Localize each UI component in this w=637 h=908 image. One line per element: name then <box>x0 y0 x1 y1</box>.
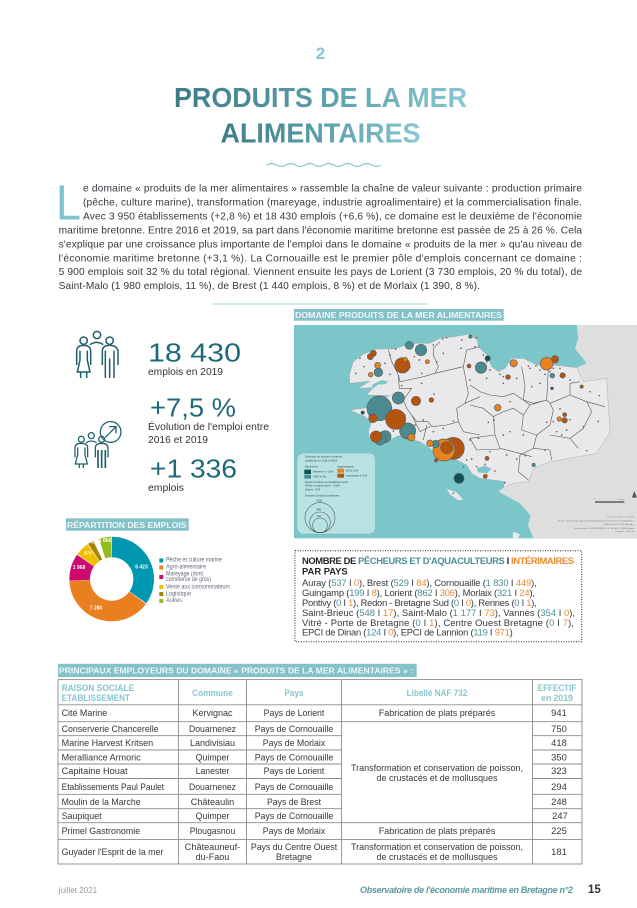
table column: town <box>185 707 240 862</box>
icon: people with rising arrow <box>75 422 121 468</box>
table header: Libellé NAF 732 <box>407 688 467 699</box>
map legend: Emploi maritime comptabilisé à part : <box>305 480 350 484</box>
map legend: 1 800 <box>315 498 323 502</box>
legend: commerce de gros) <box>166 577 211 583</box>
intro paragraph: e domaine « produits de la mer alimentaires » rassemble la chaîne de valeur suivante : production primaire <box>83 183 582 194</box>
map legend: 0% à 10% <box>346 469 359 473</box>
stat: employment change rate: 2016 et 2019 <box>148 434 208 446</box>
panel: fishers and temps by pays <box>295 551 582 642</box>
footer: date: juillet 2021 <box>58 886 98 895</box>
box list: Guingamp (199 I 8), Lorient (862 I 306), Morlaix (321 I 24), <box>302 587 535 598</box>
table column: town: Landivisiau <box>190 737 235 748</box>
table column: company: Primel Gastronomie <box>62 825 140 836</box>
title: PRODUITS DE LA MER <box>174 82 467 113</box>
intro paragraph: maritime bretonne. Entre 2016 et 2019, sa part dans l'économie maritime bretonne est passée de 25 à 26 %. Cela <box>59 226 582 237</box>
intro paragraph: s'explique par une croissance plus importante de l'emploi dans le domaine « produits de la mer » qu'au niveau de <box>59 239 582 250</box>
stat: employment change rate <box>148 395 269 446</box>
table column: pays: Pays de Lorient <box>264 765 325 776</box>
administrative boundaries <box>388 342 605 480</box>
map sources: & Réseau des CCI de Bretagne <box>603 523 635 526</box>
stat: employment change rate: +7,5 % <box>150 395 236 423</box>
table column: headcount: 350 <box>551 752 567 762</box>
stat: jobs gained: emplois <box>148 482 184 494</box>
table header <box>62 683 576 704</box>
intro paragraph: 5 900 emplois soit 32 % du total régional. Viennent ensuite les pays de Lorient (3 730 emplois, 20 % du total), de <box>59 267 582 278</box>
table header: EFFECTIF <box>538 683 576 694</box>
footer: publication name: Observatoire de l'économie maritime en Bretagne n°2 <box>360 885 573 895</box>
table column: pays: Pays de Morlaix <box>263 825 326 836</box>
map heading: DOMAINE PRODUITS DE LA MER ALIMENTAIRES <box>295 310 502 320</box>
legend: Agro-alimentaire <box>166 564 207 570</box>
table column: NAF label: Fabrication de plats préparés <box>379 825 496 836</box>
table column: town: Châteauneuf- <box>185 841 240 852</box>
bubbles: employment change by zone <box>361 335 583 483</box>
table column: NAF label <box>351 707 523 862</box>
map legend: Intérim : 675 <box>305 487 321 491</box>
table column: headcount: 247 <box>552 810 568 821</box>
intro paragraph <box>59 183 582 292</box>
table column: pays: Pays de Brest <box>267 796 321 807</box>
table column: headcount: 750 <box>551 723 567 734</box>
table grid <box>58 680 582 864</box>
scale bar and north arrow <box>594 491 637 503</box>
donut values <box>73 538 148 612</box>
table column: pays: Pays de Cornouaille <box>255 810 333 821</box>
table column: company: Moulin de la Marche <box>62 796 141 807</box>
table column: headcount: 248 <box>551 796 567 807</box>
box heading <box>302 555 574 576</box>
donut values: 6 423 <box>135 564 148 570</box>
stat: employment change rate: Évolution de l'emploi entre <box>148 420 269 433</box>
table header: Commune <box>192 688 233 699</box>
box list <box>302 577 575 638</box>
table column: company: Cité Marine <box>62 707 107 718</box>
map legend <box>297 453 375 534</box>
table column: town: Châteaulin <box>191 796 234 807</box>
table column: company <box>62 707 164 857</box>
legend: Vente aux consommateurs <box>166 584 230 590</box>
map legend: Evolution du nombre d'emplois <box>305 455 343 459</box>
panel: job breakdown <box>66 518 230 612</box>
stat: jobs gained <box>148 456 237 494</box>
map legend: Augmentation <box>337 464 355 468</box>
stat: employment 2019 <box>148 340 241 378</box>
table column: company: Capitaine Houat <box>62 765 128 776</box>
table header: Pays <box>284 688 304 699</box>
table column: town: du-Faou <box>196 851 229 862</box>
table column: pays: Pays de Cornouaille <box>255 752 333 762</box>
box list: EPCI de Dinan (124 I 0), EPCI de Lannion (119 I 971) <box>302 627 513 638</box>
panel: map <box>294 309 637 538</box>
map sources: Fond de carte : IGN BD CARTO® N° 00140-CC-IGN-Lambert <box>574 527 634 530</box>
map legend: 400 <box>317 514 322 518</box>
intro paragraph: Avec 3 950 établissements (+2,8 %) et 18 430 emplois (+6,6 %), ce domaine est le deuxième de l'économie <box>83 212 582 223</box>
stat: jobs gained: +1 336 <box>150 456 237 484</box>
legend: Mareyage (dont <box>166 572 203 578</box>
table column: NAF label: de crustacés et de mollusques <box>376 772 498 783</box>
title: ALIMENTAIRES <box>220 118 420 148</box>
footer: page number: 15 <box>588 884 601 896</box>
table column: headcount: 225 <box>551 825 567 836</box>
table column: pays: Bretagne <box>276 851 312 862</box>
donut values: 670 <box>91 540 97 544</box>
table column: NAF label: de crustacés et de mollusques <box>376 851 498 862</box>
map of Brittany <box>294 325 637 538</box>
stat: employment 2019: emplois en 2019 <box>148 366 223 378</box>
legend: Pêche et culture marine <box>166 558 223 564</box>
table column: NAF label: Fabrication de plats préparés <box>379 707 496 718</box>
intro paragraph: Saint-Malo (1 980 emplois, 11 %), de Brest (1 440 emplois, 8 %) et de Morlaix (1 390, 8 %). <box>59 281 480 292</box>
table column: pays: Pays de Morlaix <box>263 737 326 748</box>
map sources <box>558 516 635 533</box>
map legend: Diminution <box>305 464 318 468</box>
icon: group of people <box>77 331 118 378</box>
table column: town: Kervignac <box>192 707 233 718</box>
stat: employment 2019: 18 430 <box>148 340 241 368</box>
map legend: Nombre d'emplois maritimes <box>305 493 340 497</box>
wave ornament <box>267 164 381 166</box>
map sources: Projection : RGF 93 <box>615 530 635 533</box>
table column: company: Meralliance Armoric <box>62 752 141 762</box>
panel: key figures <box>75 331 269 494</box>
box list: Pontivy (0 I 1), Redon - Bretagne Sud (0 I 0), Rennes (0 I 1), <box>302 597 537 608</box>
table column: town: Douarnenez <box>189 781 236 792</box>
donut values: 973 <box>84 550 92 556</box>
table column: pays <box>251 707 338 862</box>
box list: Saint-Brieuc (548 I 17), Saint-Malo (1 177 I 73), Vannes (354 I 0), <box>302 607 575 618</box>
legend: Logistique <box>166 592 192 598</box>
legend: Autres <box>166 598 182 604</box>
table column: headcount: 294 <box>551 781 567 792</box>
map legend: -10% à 0% <box>313 474 327 478</box>
title <box>174 82 467 148</box>
table heading: PRINCIPAUX EMPLOYEURS DU DOMAINE « PRODUITS DE LA MER ALIMENTAIRES » : <box>59 666 413 676</box>
drop cap: L <box>56 176 81 230</box>
heading: RÉPARTITION DES EMPLOIS <box>67 520 187 530</box>
small establishment markers <box>356 337 599 493</box>
map legend: supérieure à 10% <box>346 474 368 478</box>
donut chart <box>80 547 144 611</box>
box list: Auray (537 I 0), Brest (529 I 84), Cornouaille (1 830 I 449), <box>302 577 537 588</box>
table column: headcount: 181 <box>551 846 567 857</box>
table column: headcount: 323 <box>551 765 567 776</box>
map sources: Date de création : juin 2021 <box>607 516 635 519</box>
intro paragraph: l'économie maritime bretonne (+3,1 %). La Cornouaille est le premier pôle d'emplois concernant ce domaine : <box>59 253 582 264</box>
table column: pays: Pays de Cornouaille <box>255 723 333 734</box>
table column: pays: Pays de Lorient <box>264 707 325 718</box>
section number: 2 <box>316 44 325 63</box>
table column: company: Etablissements Paul Paulet <box>62 781 164 792</box>
table column: NAF label: Transformation et conservation de poisson, <box>351 762 523 773</box>
map legend: Inférieure à -10% <box>313 470 334 474</box>
donut values: 1 066 <box>99 538 111 544</box>
table column: company: Marine Harvest Kritsen <box>62 737 153 748</box>
table column: headcount: 941 <box>551 707 567 718</box>
map legend: Pêche et aquaculture : 6 600 <box>305 484 340 488</box>
table column: pays: Pays de Cornouaille <box>255 781 333 792</box>
map legend: maritimes en 2016 et 2019 <box>305 458 338 462</box>
box heading: PAR PAYS <box>302 566 348 576</box>
scale bar and north arrow: 0 <box>594 499 596 501</box>
sea inlets <box>372 380 492 473</box>
table header: ETABLISSEMENT <box>62 693 130 704</box>
table column: company: Conserverie Chancerelle <box>62 723 159 734</box>
table column: pays: Pays du Centre Ouest <box>251 841 338 852</box>
donut values: 7 280 <box>90 606 102 612</box>
table column: town: Quimper <box>196 752 229 762</box>
table column: headcount: 418 <box>551 737 567 748</box>
legend <box>159 558 230 604</box>
donut values: 1 968 <box>73 565 85 571</box>
table column: town: Douarnenez <box>189 723 236 734</box>
intro paragraph: (pêche, culture marine), transformation (mareyage, industrie agroalimentaire) et la commercialisation finale. <box>83 197 582 208</box>
map sources: Source : Réseau des agences de développement et d'urbanisme de Bretagne, <box>558 520 634 523</box>
panel: main employers table <box>58 664 582 864</box>
table column: NAF label: Transformation et conservation de poisson, <box>351 841 523 852</box>
table column: town: Lanester <box>196 765 229 776</box>
scale bar and north arrow: 25 km <box>618 499 624 501</box>
map legend: 800 <box>317 508 322 512</box>
table header: RAISON SOCIALE <box>62 683 135 694</box>
table column: headcount <box>551 707 568 857</box>
box heading: NOMBRE DE PÊCHEURS ET D'AQUACULTEURS I INTÉRIMAIRES <box>302 555 574 566</box>
table column: town: Plougasnou <box>190 825 235 836</box>
table column: company: Guyader l'Esprit de la mer <box>62 846 163 857</box>
table column: town: Quimper <box>196 810 229 821</box>
table header: en 2019 <box>541 693 573 704</box>
table column: company: Saupiquet <box>62 810 102 821</box>
box list: Vitré - Porte de Bretagne (0 I 1), Centre Ouest Bretagne (0 I 7), <box>302 617 574 628</box>
